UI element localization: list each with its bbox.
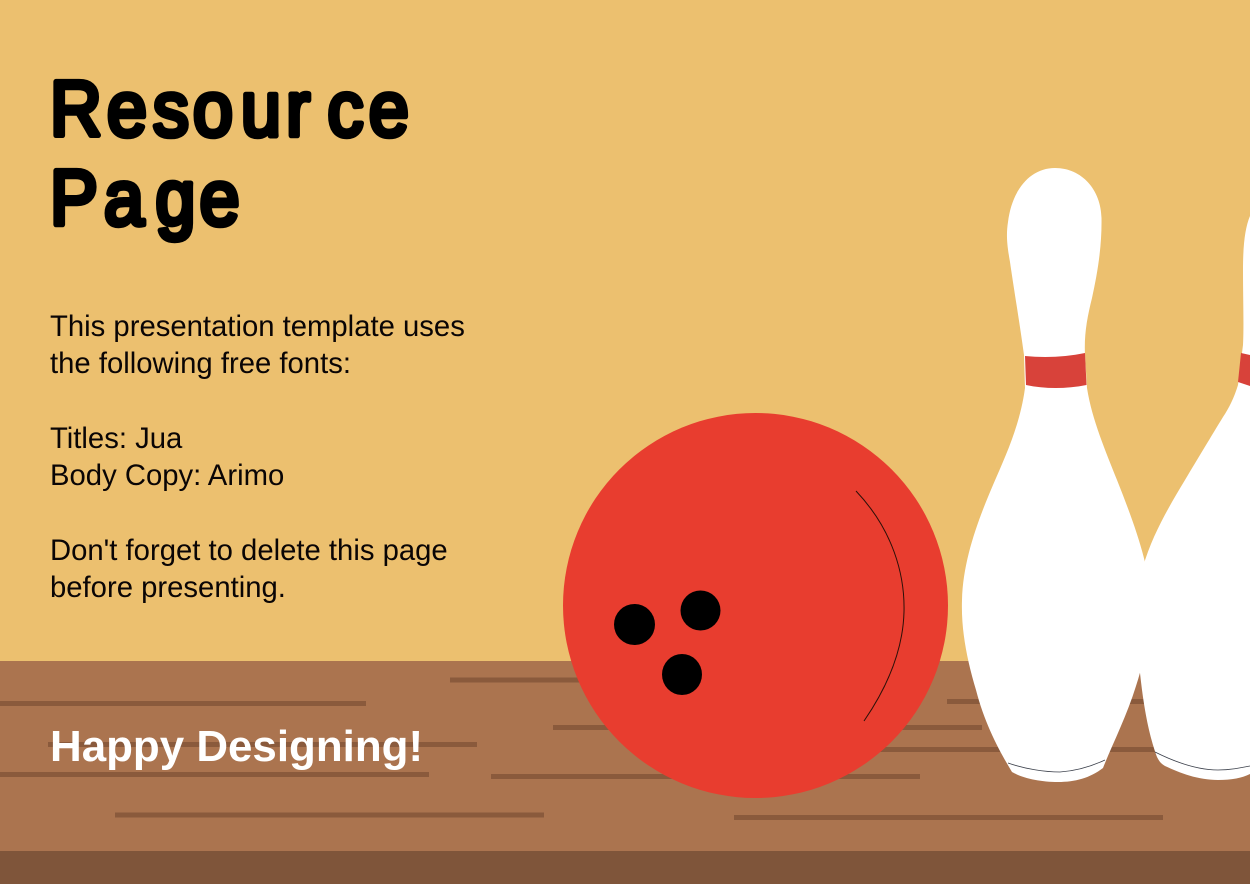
title: Page [50, 154, 240, 241]
pin base line [1008, 760, 1105, 772]
wooden floor [0, 661, 1250, 852]
floor base strip [0, 851, 1250, 884]
pin base line [1155, 752, 1250, 770]
body text: Don't forget to delete this page [50, 535, 448, 567]
body text: This presentation template uses [50, 311, 465, 343]
body text: Body Copy: Arimo [50, 460, 284, 492]
pin stripe [1238, 353, 1250, 386]
bowling ball [563, 413, 948, 798]
body text: the following free fonts: [50, 348, 351, 380]
body text: Titles: Jua [50, 423, 183, 455]
ball highlight arc [856, 491, 904, 721]
ball finger holes [614, 590, 720, 695]
pin stripe [1025, 353, 1086, 388]
first bowling pin [962, 168, 1151, 782]
body text: before presenting. [50, 572, 286, 604]
title: Resource [50, 65, 409, 152]
title [50, 65, 409, 241]
closing message: Happy Designing! [50, 722, 423, 771]
second bowling pin [1138, 216, 1250, 780]
background wall [0, 0, 1250, 662]
body text [50, 311, 465, 604]
